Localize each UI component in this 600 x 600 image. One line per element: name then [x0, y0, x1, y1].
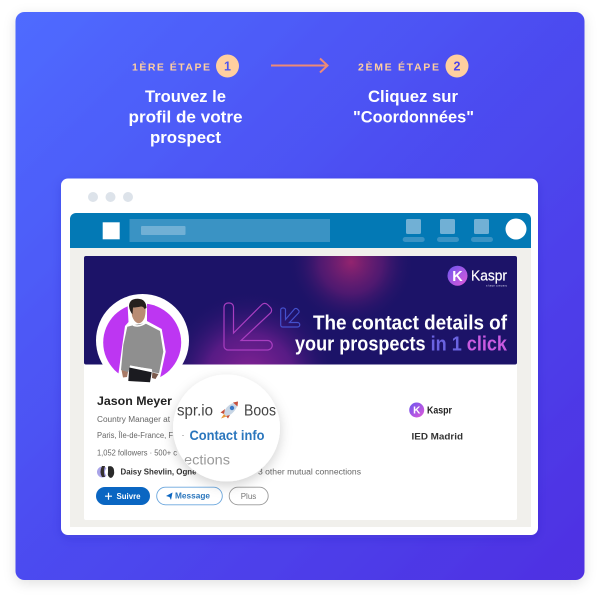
big arrow icon [224, 303, 272, 350]
Kaspr logo: Kaspr [471, 268, 507, 284]
magnifier callout [173, 374, 280, 482]
step 1 text: prospect [150, 129, 222, 147]
profile details: 3 other mutual connections [258, 468, 361, 476]
company logo [409, 402, 452, 418]
button: Suivre [96, 487, 150, 505]
step 2 header [358, 54, 468, 78]
step 1 text [128, 88, 242, 147]
step 2 badge: 2 [454, 60, 461, 74]
profile details [97, 394, 361, 478]
step 1 text: profil de votre [128, 108, 242, 126]
button: Message: Message [175, 492, 211, 500]
step 2 text: "Coordonnées" [353, 108, 474, 126]
button: Message [157, 487, 222, 505]
button: Plus: Plus [241, 492, 256, 501]
mutual connections text: Daisy Shevlin, Ogne [120, 468, 197, 476]
magnifier callout: · [182, 430, 184, 440]
panel: profile card [84, 300, 517, 520]
step 2 label: 2ÈME ÉTAPE [358, 60, 439, 74]
magnified headline: spr.io [177, 402, 213, 420]
button: Plus [229, 487, 268, 505]
step 2 text: Cliquez sur [368, 88, 459, 106]
rocket icon [220, 402, 238, 418]
banner headline: The contact details of [313, 312, 507, 334]
mutual avatars [97, 466, 116, 478]
step 1 header [132, 54, 239, 78]
followers: 1,052 followers · 500+ c [97, 448, 177, 458]
company block [409, 402, 463, 442]
navigation bar [70, 213, 531, 248]
Kaspr logo: K [452, 269, 463, 285]
job title: Country Manager at [97, 415, 171, 424]
name: Jason Meyer [97, 394, 172, 408]
step 1 text: Trouvez le [145, 88, 226, 106]
page background [70, 240, 531, 527]
company logo: Kaspr [427, 406, 452, 416]
step 1 label: 1ÈRE ÉTAPE [132, 60, 210, 74]
person [118, 299, 166, 382]
Kaspr logo [448, 266, 508, 288]
arrow between steps [271, 58, 328, 72]
banner [84, 256, 517, 364]
faded connections text: ections [184, 452, 230, 468]
profile photo [96, 294, 189, 387]
step 2 text [353, 88, 474, 126]
panel: browser window [61, 178, 538, 535]
step 1 badge: 1 [224, 60, 231, 74]
small arrow icon [281, 308, 300, 327]
banner headline [295, 312, 508, 356]
banner headline: your prospects in 1 click [295, 334, 508, 356]
Kaspr logo: a kaspr company [486, 284, 508, 288]
button: Suivre: Suivre [116, 492, 141, 501]
magnifier callout: Boos [244, 402, 276, 420]
company logo: K [413, 406, 421, 416]
school name: IED Madrid [412, 432, 463, 442]
browser dots [88, 192, 133, 202]
location: Paris, Île-de-France, F [97, 431, 173, 440]
Contact info link: Contact info [190, 427, 264, 443]
